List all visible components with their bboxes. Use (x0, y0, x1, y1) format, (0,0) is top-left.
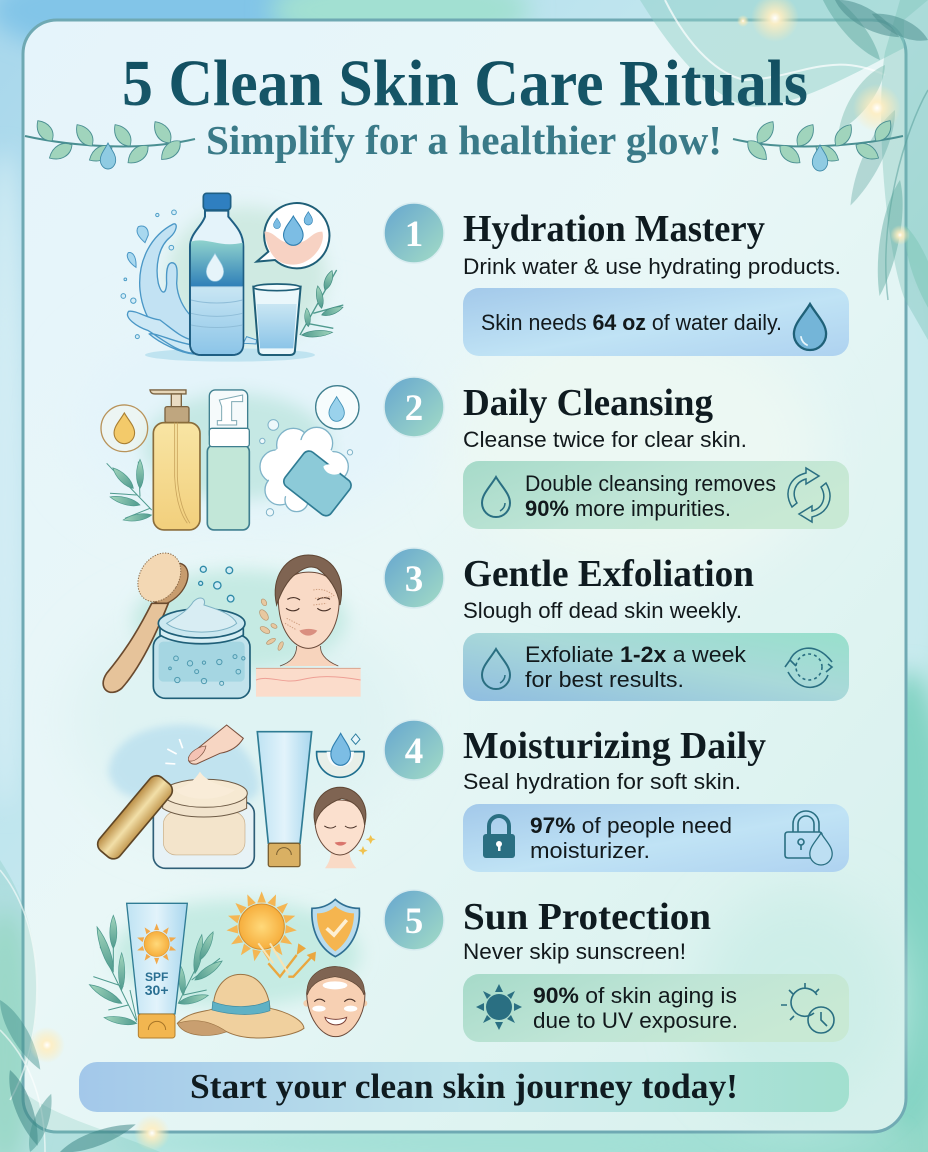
icon: water drop (794, 304, 826, 350)
heading: Gentle Exfoliation (463, 553, 754, 595)
step 2: daily cleansing (384, 377, 849, 529)
stat box: for best results. (525, 667, 684, 692)
number badge 3 (384, 548, 444, 608)
description: Seal hydration for soft skin. (463, 769, 741, 794)
icon: drop outline (482, 477, 510, 517)
stat box (463, 804, 849, 872)
description: Slough off dead skin weekly. (463, 598, 742, 623)
heading: Daily Cleansing (463, 382, 713, 424)
stat box: 90% of skin aging is (533, 983, 737, 1008)
laurel left (25, 117, 195, 169)
icon: solid lock (483, 816, 515, 858)
number badge 5 (384, 890, 444, 950)
stat box: 97% of people need (530, 813, 732, 838)
stat box: Skin needs 64 oz of water daily. (481, 310, 782, 335)
stat box: moisturizer. (530, 838, 650, 863)
top right foliage (640, 0, 928, 340)
illustration: cleansing (101, 386, 359, 530)
illustration: hydration (121, 193, 344, 362)
description: Cleanse twice for clear skin. (463, 427, 747, 452)
stat box (463, 633, 849, 701)
heading: Sun Protection (463, 896, 711, 938)
stat box: 90% more impurities. (525, 496, 731, 521)
bottom left foliage (0, 860, 160, 1152)
icon: drop outline (482, 649, 510, 689)
number badge 5: 5 (405, 901, 423, 942)
icon: solid sun (476, 984, 522, 1030)
heading: Moisturizing Daily (463, 725, 766, 767)
number badge 4 (384, 720, 444, 780)
call to action banner: Start your clean skin journey today! (190, 1067, 738, 1106)
stat box (463, 461, 849, 529)
number badge 2 (384, 377, 444, 437)
number badge 4: 4 (405, 731, 423, 772)
description: Never skip sunscreen! (463, 939, 686, 964)
illustration: sun protection: 30+ (145, 982, 169, 998)
laurel right (733, 117, 903, 171)
illustration: sun protection: SPF (145, 970, 168, 984)
icon: cycle arrows (785, 648, 832, 687)
description: Drink water & use hydrating products. (463, 254, 841, 279)
number badge 1 (384, 203, 444, 263)
title: 5 Clean Skin Care Rituals (122, 47, 808, 120)
illustration: moisturizing (94, 725, 376, 868)
call to action banner (79, 1062, 849, 1112)
step 4: moisturizing daily (384, 720, 849, 872)
stat box (463, 974, 849, 1042)
number badge 3: 3 (405, 559, 423, 600)
step 1: hydration mastery (384, 203, 849, 356)
heading: Hydration Mastery (463, 208, 765, 250)
step 3: gentle exfoliation (384, 548, 849, 701)
stat box: Exfoliate 1-2x a week (525, 642, 747, 667)
stat box: due to UV exposure. (533, 1008, 738, 1033)
subtitle: Simplify for a healthier glow! (206, 117, 722, 163)
illustration: exfoliation (103, 545, 361, 698)
icon: lock with drop (785, 811, 832, 865)
illustration: sun protection (88, 891, 367, 1038)
icon: recycle arrows (788, 468, 830, 522)
step 5: sun protection (384, 890, 849, 1042)
icon: sun with clock (781, 983, 834, 1033)
number badge 1: 1 (405, 214, 423, 255)
stat box: Double cleansing removes (525, 471, 776, 496)
stat box (463, 288, 849, 356)
number badge 2: 2 (405, 388, 423, 429)
